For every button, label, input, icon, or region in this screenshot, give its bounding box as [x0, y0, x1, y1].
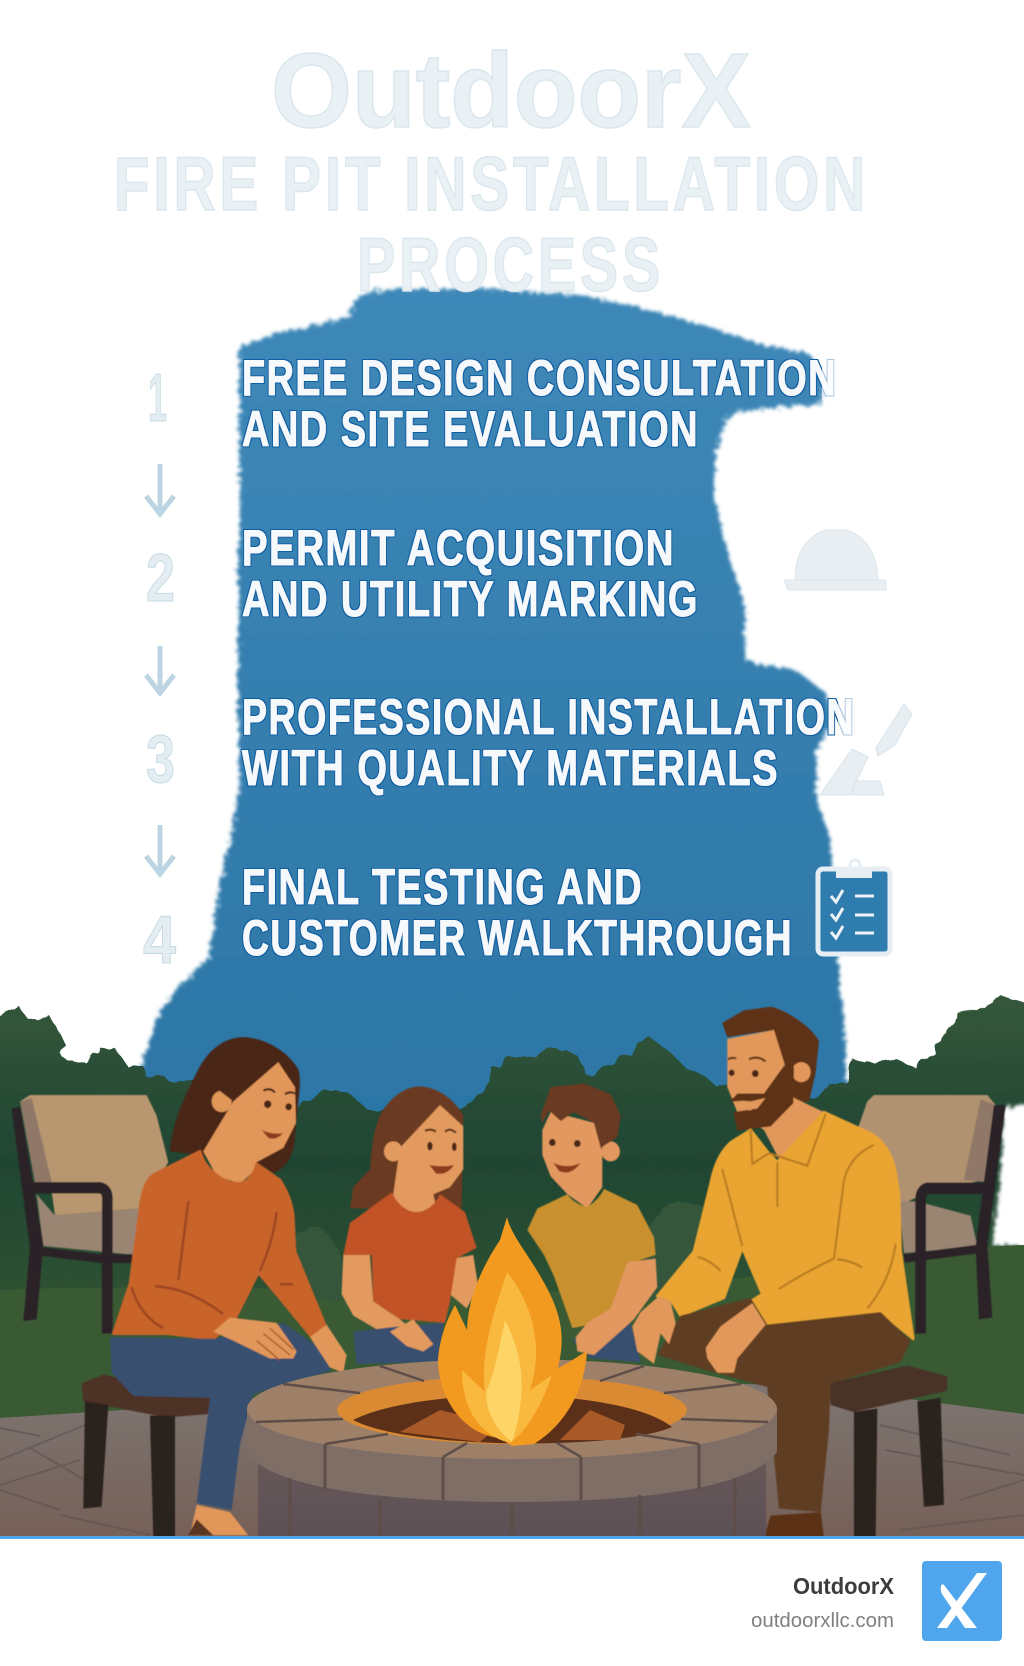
- tree line: [0, 996, 1024, 1300]
- step 3 text: WITH QUALITY MATERIALS: [242, 740, 779, 796]
- patio: [0, 1380, 1024, 1540]
- flame: [438, 1217, 587, 1446]
- step 4 text: [242, 859, 793, 966]
- logo: [922, 1561, 1002, 1641]
- footer background: [0, 1537, 1024, 1666]
- step 1 text: [242, 350, 837, 457]
- title: Process: PROCESS: [357, 223, 664, 308]
- step 4 text: CUSTOMER WALKTHROUGH: [242, 910, 793, 966]
- step 2 text: [242, 520, 699, 627]
- woman: [110, 1037, 347, 1535]
- fire pit: [247, 1359, 777, 1540]
- shrubs: [290, 1202, 730, 1300]
- footer brand name: OutdoorX: [793, 1573, 895, 1599]
- icon: clipboard: [818, 860, 890, 954]
- icon: trowel: [820, 704, 912, 795]
- soft figures and furniture: [12, 1007, 1006, 1537]
- step 2 number: 2: [146, 540, 175, 616]
- title: OutdoorX: OutdoorX: [271, 32, 751, 150]
- step 3 number: 3: [146, 721, 175, 797]
- arrow 1: [146, 464, 174, 514]
- man: [632, 1007, 913, 1537]
- pit block joints: [256, 1366, 768, 1536]
- right chair: [857, 1095, 1006, 1334]
- footer divider: [0, 1536, 1024, 1539]
- step 2 text: PERMIT ACQUISITION: [242, 520, 675, 576]
- white gap at right edge: [991, 1102, 1024, 1248]
- right stool: [829, 1366, 947, 1537]
- step 4 number: 4: [143, 902, 176, 978]
- step 4 text: FINAL TESTING AND: [242, 859, 643, 915]
- left chair: [12, 1095, 168, 1334]
- blue brushed panel: [130, 288, 846, 1120]
- arrow 3: [146, 825, 174, 874]
- boy: [527, 1084, 657, 1362]
- lawn: [0, 1245, 1024, 1430]
- step 1 number: 1: [148, 360, 167, 436]
- patio joints: [0, 1425, 1024, 1535]
- step 1 text: AND SITE EVALUATION: [242, 401, 699, 457]
- footer url: outdoorxllc.com: [751, 1610, 894, 1632]
- left stool: [82, 1375, 210, 1537]
- girl: [342, 1086, 478, 1364]
- arrow 2: [146, 646, 174, 693]
- step 2 text: AND UTILITY MARKING: [242, 571, 699, 627]
- step 1 text: FREE DESIGN CONSULTATION: [242, 350, 837, 406]
- step 3 text: [242, 689, 855, 796]
- icon: hard hat: [784, 530, 886, 590]
- scene: backyard illustration: [0, 996, 1024, 1540]
